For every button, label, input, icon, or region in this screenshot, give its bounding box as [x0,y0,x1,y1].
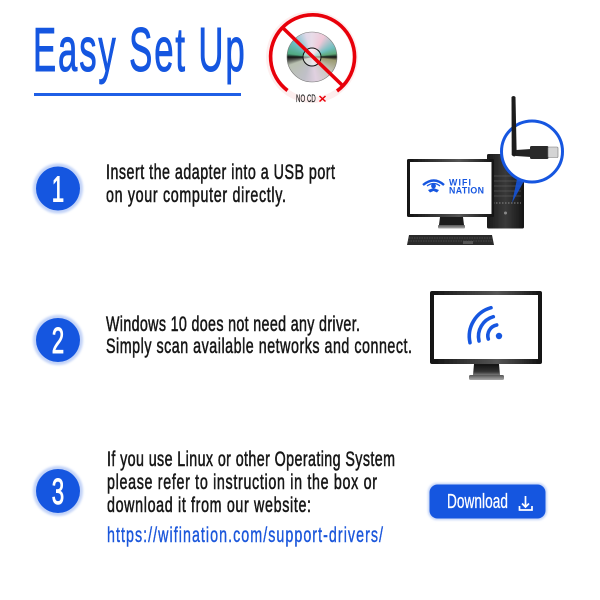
download button [428,483,547,520]
step 3 text: If you use Linux or other Operating System [107,447,395,471]
keyboard [407,235,494,245]
step 1 badge: 1 [52,170,64,210]
step 3 badge: 3 [52,473,64,512]
step 3 badge [33,466,83,516]
step 3 text: download it from our website: [107,493,311,517]
step 2 badge [33,315,83,365]
step 3 text [107,447,395,517]
logo: NATION [449,186,484,196]
step 2 badge: 2 [52,322,64,361]
title underline [34,93,241,96]
icon: download [520,496,532,510]
step 3 text: please refer to instruction in the box or [107,470,377,494]
antenna [512,96,517,156]
icon: no CD: NO CD [296,92,316,104]
download button: Download [447,490,508,513]
illustration: computer with USB adapter [407,96,562,245]
monitor [407,159,494,228]
step 2 text [106,312,412,358]
callout [502,121,562,203]
website link: https://wifination.com/support-drivers/ [107,523,383,547]
logo: WIFI [449,178,471,188]
step 2 text: Windows 10 does not need any driver. [106,312,360,336]
title: Easy Set Up [33,15,245,85]
adapter [516,146,558,159]
step 1 text: on your computer directly. [106,183,286,207]
step 2 text: Simply scan available networks and connect. [106,334,412,358]
icon: no CD [266,11,358,104]
tower [487,154,524,228]
step 1 badge [33,164,83,214]
step 1 text: Insert the adapter into a USB port [106,160,335,184]
step 1 text [106,160,335,207]
icon: wifi [469,308,502,343]
logo [423,178,484,196]
illustration: monitor with wifi [430,291,542,380]
